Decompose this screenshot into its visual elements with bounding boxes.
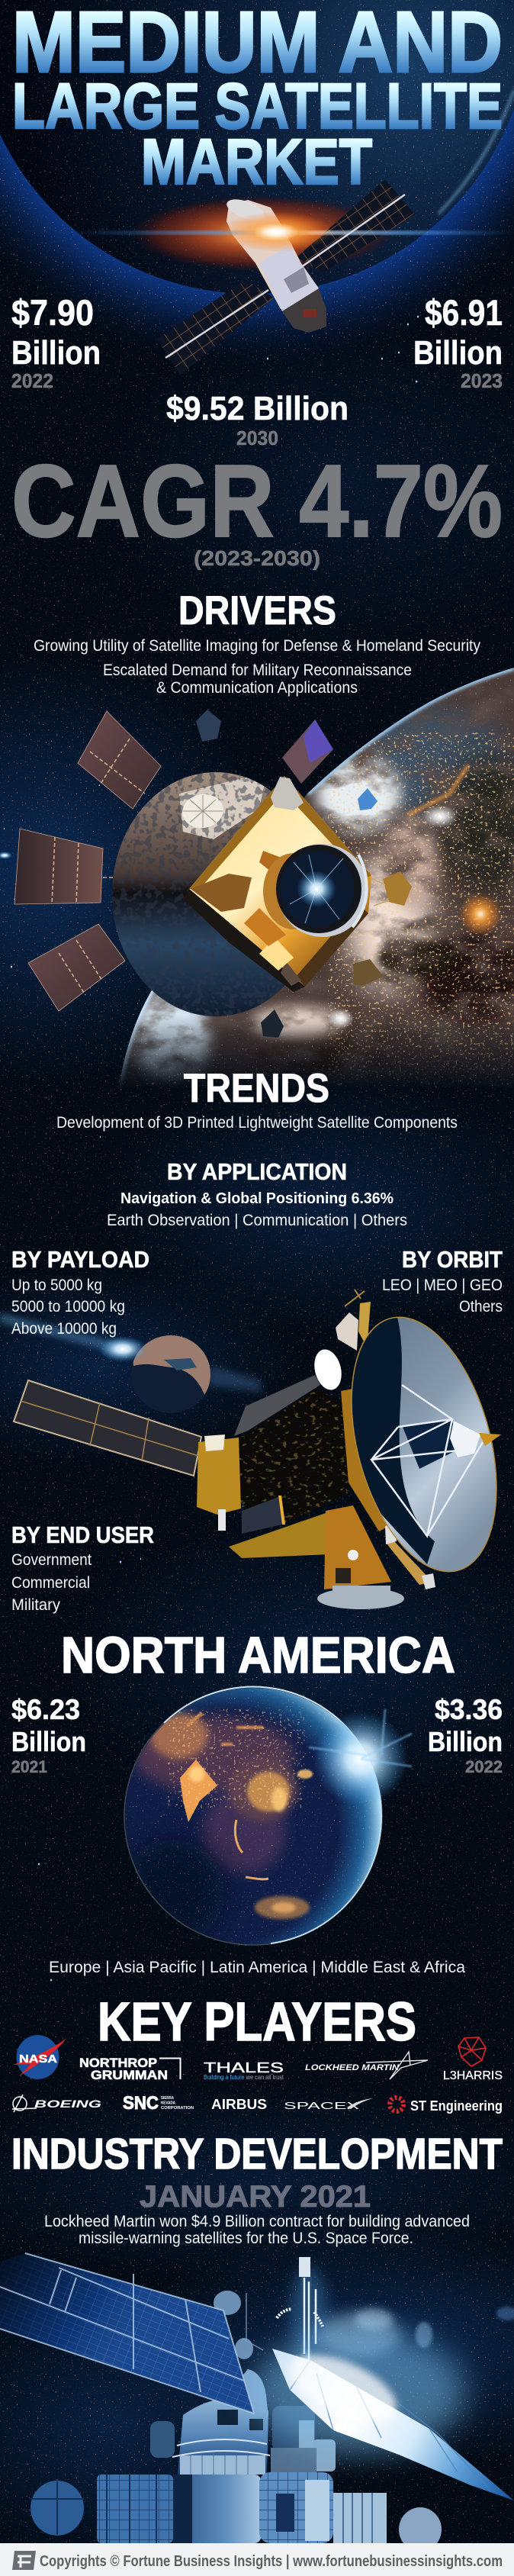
trends heading: TRENDS <box>184 1066 329 1111</box>
drivers text: & Communication Applications <box>156 679 358 697</box>
by payload segment: Up to 5000 kg <box>11 1277 102 1294</box>
logo: Sierra Nevada Corporation: SIERRA <box>161 2096 174 2101</box>
spherical hull <box>112 772 285 1016</box>
logo: Lockheed Martin: LOCKHEED MARTIN <box>305 2063 400 2072</box>
drivers text: Growing Utility of Satellite Imaging for Defense & Homeland Security <box>34 637 480 655</box>
dish <box>351 1317 501 1572</box>
logo: Thales: THALES <box>204 2060 284 2075</box>
logo: Thales: Building a future we can all trust <box>204 2074 284 2081</box>
logo: Thales <box>204 2060 284 2081</box>
logo: Sierra Nevada Corporation <box>123 2093 194 2114</box>
gold body <box>183 776 371 992</box>
logo: ST Engineering: ST Engineering <box>410 2098 503 2114</box>
bright right solar panel <box>252 2331 514 2500</box>
by payload segment: BY PAYLOAD <box>11 1246 149 1273</box>
stat: 2022 market size <box>11 292 101 392</box>
stat: 2030 market size: 2030 <box>236 427 278 449</box>
by application segment: Earth Observation | Communication | Others <box>107 1212 407 1229</box>
satellite 4 space station <box>0 2253 514 2552</box>
satellite 2 with solar panels <box>0 710 502 1038</box>
by orbit segment: LEO | MEO | GEO <box>382 1277 503 1294</box>
by end user segment: BY END USER <box>11 1521 154 1548</box>
planet with night lights, north america section <box>118 1687 412 1946</box>
key players heading: KEY PLAYERS <box>98 1992 416 2053</box>
by end user segment: Commercial <box>11 1574 90 1592</box>
stat: 2030 market size <box>166 390 349 449</box>
bus <box>197 1375 435 1589</box>
title: MARKET <box>141 126 372 198</box>
trends text: Development of 3D Printed Lightweight Satellite Components <box>56 1114 458 1132</box>
stat: 2022 market size: 2022 <box>11 369 53 392</box>
satellite 3 with dish <box>14 1290 514 1609</box>
logo: SpaceX <box>284 2098 373 2111</box>
logo: L3Harris: L3HARRIS <box>443 2069 503 2082</box>
debris <box>196 710 412 1038</box>
drum and upper modules <box>150 2291 336 2475</box>
stat: north america 2022: 2022 <box>465 1757 503 1776</box>
logo: Northrop Grumman: GRUMMAN <box>91 2068 168 2082</box>
small planet with flare <box>0 1314 263 1413</box>
planet behind title <box>0 0 514 374</box>
logo: Sierra Nevada Corporation: CORPORATION <box>161 2106 194 2111</box>
logo: Sierra Nevada Corporation: NEVADA <box>161 2101 175 2106</box>
stat: 2023 market size: $6.91 <box>425 292 503 333</box>
logo: L3Harris <box>443 2037 503 2082</box>
logo: Boeing: BOEING <box>34 2098 101 2110</box>
stat: north america 2021 <box>11 1694 86 1776</box>
logo: SpaceX: SPACEX <box>284 2100 360 2111</box>
by orbit segment <box>382 1246 503 1315</box>
by application segment <box>107 1158 407 1229</box>
by application segment: Navigation & Global Positioning 6.36% <box>120 1190 394 1207</box>
north america heading: NORTH AMERICA <box>61 1627 455 1684</box>
clouds <box>316 2307 514 2356</box>
logo: Lockheed Martin <box>305 2052 428 2079</box>
tower <box>277 2257 327 2359</box>
left solar panel <box>0 2253 254 2413</box>
stat: 2022 market size: $7.90 <box>11 292 94 333</box>
stat: north america 2021: 2021 <box>11 1757 47 1776</box>
stat: north america 2021: Billion <box>11 1726 86 1757</box>
logo: Northrop Grumman <box>79 2056 180 2082</box>
stat: 2023 market size <box>413 292 503 392</box>
satellite body <box>224 195 326 333</box>
by end user segment: Military <box>11 1596 60 1614</box>
lens flare <box>69 212 514 252</box>
stat: 2022 market size: Billion <box>11 334 101 372</box>
by application segment: BY APPLICATION <box>167 1158 347 1185</box>
lower module row <box>31 2472 442 2552</box>
logo: Sierra Nevada Corporation: SNC <box>123 2093 159 2114</box>
industry development date: JANUARY 2021 <box>140 2180 371 2214</box>
solar panel lower left <box>157 280 274 375</box>
industry development text: Lockheed Martin won $4.9 Billion contract for building advanced <box>44 2213 470 2230</box>
by payload segment <box>11 1246 149 1338</box>
stat: 2023 market size: Billion <box>413 334 503 372</box>
lens <box>263 844 368 937</box>
logo: Northrop Grumman: NORTHROP <box>79 2056 157 2070</box>
drivers text <box>34 637 480 697</box>
logo: Airbus: AIRBUS <box>211 2097 267 2112</box>
planet behind drivers satellite <box>114 664 514 1099</box>
footer bar <box>0 2543 514 2576</box>
solar array <box>14 1380 201 1476</box>
stat: 2030 market size: $9.52 Billion <box>166 390 349 427</box>
by payload segment: Above 10000 kg <box>11 1320 117 1338</box>
icon: Fortune Business Insights logo <box>12 2551 36 2570</box>
by end user segment: Government <box>11 1551 92 1569</box>
logo: NASA <box>13 2035 66 2079</box>
logo: Boeing <box>12 2095 101 2112</box>
other regions: Europe | Asia Pacific | Latin America | Middle East & Africa <box>49 1959 465 1976</box>
industry development text: missile-warning satellites for the U.S. Space Force. <box>79 2230 413 2247</box>
key player logos <box>12 2035 503 2114</box>
stat: north america 2022 <box>428 1694 503 1776</box>
base disc <box>317 1586 404 1609</box>
by orbit segment: Others <box>459 1298 503 1315</box>
antennas <box>310 1290 371 1393</box>
drivers text: Escalated Demand for Military Reconnaissance <box>103 662 412 679</box>
title <box>12 0 503 198</box>
stat: 2023 market size: 2023 <box>461 369 503 392</box>
logo: NASA: NASA <box>19 2053 57 2066</box>
solar panel upper right <box>297 179 415 272</box>
stat: north america 2022: $3.36 <box>435 1694 503 1725</box>
satellite 1 under title <box>69 179 514 375</box>
by end user segment <box>11 1521 154 1614</box>
stat: north america 2021: $6.23 <box>11 1694 80 1725</box>
by payload segment: 5000 to 10000 kg <box>11 1298 125 1315</box>
by orbit segment: BY ORBIT <box>402 1246 503 1273</box>
glints <box>0 805 502 1029</box>
CAGR figure: (2023-2030) <box>194 546 320 570</box>
panels <box>14 711 333 1011</box>
drivers heading: DRIVERS <box>178 588 336 633</box>
stat: north america 2022: Billion <box>428 1726 503 1757</box>
industry development text <box>44 2213 470 2247</box>
